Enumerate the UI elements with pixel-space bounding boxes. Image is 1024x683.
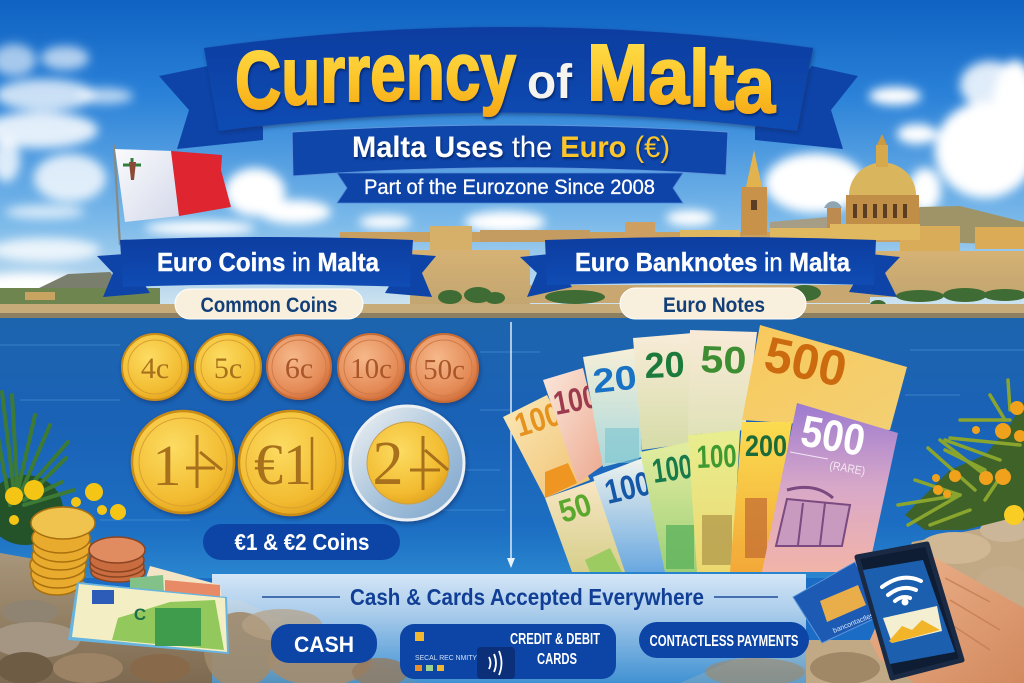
coin: 2 euro bimetal: 2 xyxy=(372,430,404,498)
background: sky xyxy=(0,0,1024,320)
pill: common coins: Common Coins xyxy=(200,294,338,317)
ribbon right tail xyxy=(755,66,858,149)
section ribbon: euro banknotes xyxy=(520,237,900,297)
large coins row xyxy=(132,406,464,520)
pill: contactless payments: CONTACTLESS PAYMENTS xyxy=(650,633,798,650)
background: water ripples xyxy=(0,345,1024,560)
note: large green note xyxy=(68,582,229,654)
background: clouds xyxy=(0,44,1024,297)
note: 100 blue: 100 xyxy=(601,464,655,512)
note: 500 orange: 500 xyxy=(760,326,852,398)
coin: 50c xyxy=(410,334,478,402)
ribbon main body xyxy=(204,27,813,131)
note: 50 green xyxy=(688,330,757,435)
pill: cash: CASH xyxy=(294,632,354,657)
note: 100 green: 100 xyxy=(650,448,695,491)
icon: wifi dot xyxy=(902,598,908,606)
note: 100 red: 100 xyxy=(550,377,601,422)
note: 50 cream xyxy=(545,480,630,572)
note: 100 green xyxy=(640,442,698,572)
coin: 5c xyxy=(195,334,261,400)
coin: 4c xyxy=(122,334,188,400)
icon: george cross xyxy=(123,158,141,180)
note: 200 yellow: 200 xyxy=(745,430,787,463)
icon: bank card: SECAL REC NMITY xyxy=(415,655,477,662)
note: small stacked notes xyxy=(130,566,222,600)
stack: copper coins xyxy=(89,537,145,582)
note: 200 blue xyxy=(583,348,642,467)
coin: 10c xyxy=(338,334,404,400)
ribbon left tail xyxy=(159,66,263,149)
building: small dome xyxy=(824,201,842,228)
bottom strip panel xyxy=(204,574,806,683)
pill: credit and debit cards xyxy=(400,624,616,679)
section divider arrow xyxy=(507,322,515,568)
pill: common coins xyxy=(175,289,363,319)
note: 100 blue xyxy=(593,458,670,572)
title word: Currency: Currency xyxy=(235,26,516,126)
note: 20 green xyxy=(633,333,693,450)
subtitle ribbon: part of the eurozone: Part of the Eurozone Since 2008 xyxy=(364,176,655,199)
subtitle ribbon: Malta uses the euro: Malta Uses the Euro (€) xyxy=(352,131,670,164)
title ribbon xyxy=(159,26,858,149)
pill: contactless payments xyxy=(639,622,809,658)
note: 500 orange xyxy=(742,325,907,430)
building: bell tower xyxy=(741,150,767,235)
note: 100 red xyxy=(543,368,606,483)
icon: image card xyxy=(883,606,942,643)
background: sea xyxy=(0,318,1024,578)
coin: euro one: €1 xyxy=(254,432,312,497)
right plant with yellow flowers xyxy=(898,380,1024,530)
note: 50 green: 50 xyxy=(700,339,747,383)
note: 50 cream: 50 xyxy=(555,486,596,530)
coin: 6c: 6c xyxy=(285,352,313,385)
stack: gold coins xyxy=(30,507,95,595)
note: 100 yellow-green: 100 xyxy=(696,438,737,475)
background: left rocks xyxy=(0,553,420,683)
section ribbon: euro coins: Euro Coins in Malta xyxy=(157,247,379,277)
note: 200 blue: 20 xyxy=(591,359,639,401)
small coins row xyxy=(122,334,478,402)
hand holding phone xyxy=(870,556,1024,683)
coin: 1 euro xyxy=(132,411,234,513)
Maltese flag xyxy=(114,145,231,245)
pill: euro notes: Euro Notes xyxy=(663,294,765,317)
note: 200 yellow xyxy=(730,422,792,572)
section ribbon: euro banknotes: Euro Banknotes in Malta xyxy=(575,247,850,277)
smartphone with wifi icon xyxy=(857,544,962,678)
note: 500 purple rare: 500 xyxy=(797,407,869,466)
note: 100 yellow-green xyxy=(688,430,740,572)
coin: 2 euro bimetal xyxy=(350,406,464,520)
section ribbon: euro coins xyxy=(97,237,436,297)
title word: of: of xyxy=(527,56,573,109)
left plant with yellow flowers xyxy=(0,392,126,545)
banknote fan xyxy=(503,325,907,572)
title word: Malta: Malta xyxy=(587,28,775,129)
note: 500 purple rare: (RARE) xyxy=(828,458,866,478)
building: cathedral dome xyxy=(830,134,920,240)
strip heading with rule lines: Cash & Cards Accepted Everywhere xyxy=(350,584,704,610)
coin: 1 euro: 1 xyxy=(152,433,182,498)
coin: 6c xyxy=(267,335,331,399)
label: 1 and 2 euro coins xyxy=(203,524,400,560)
blue payment card: bancontactless xyxy=(832,611,879,635)
note: 100 orange xyxy=(503,395,590,498)
note: 100 orange: 100 xyxy=(510,395,565,444)
pill: euro notes xyxy=(620,288,806,319)
subtitle ribbon: Malta uses the euro xyxy=(292,125,728,176)
blue payment card xyxy=(793,562,882,643)
label: 1 and 2 euro coins: €1 & €2 Coins xyxy=(234,529,370,555)
coin: euro one xyxy=(239,411,343,515)
background: distant harbour and city xyxy=(0,206,1024,318)
note: large green note: C xyxy=(134,605,146,624)
coin: 10c: 10c xyxy=(350,353,392,385)
background: right rocks xyxy=(680,518,1024,683)
icon: bank card xyxy=(415,632,515,679)
pill: credit and debit cards: CARDS xyxy=(537,651,577,668)
coin stacks xyxy=(30,507,145,595)
note: 20 green: 20 xyxy=(644,344,685,386)
pill: credit and debit cards: CREDIT & DEBIT xyxy=(510,631,600,648)
pill: cash xyxy=(271,624,377,663)
coin: 4c: 4c xyxy=(141,352,169,385)
subtitle ribbon: part of the eurozone xyxy=(337,173,683,203)
icon: wifi xyxy=(882,578,921,601)
cash banknotes pile xyxy=(68,566,229,654)
note: 500 purple rare xyxy=(762,403,898,572)
coin: 50c: 50c xyxy=(423,354,465,386)
coin: 5c: 5c xyxy=(214,352,242,385)
